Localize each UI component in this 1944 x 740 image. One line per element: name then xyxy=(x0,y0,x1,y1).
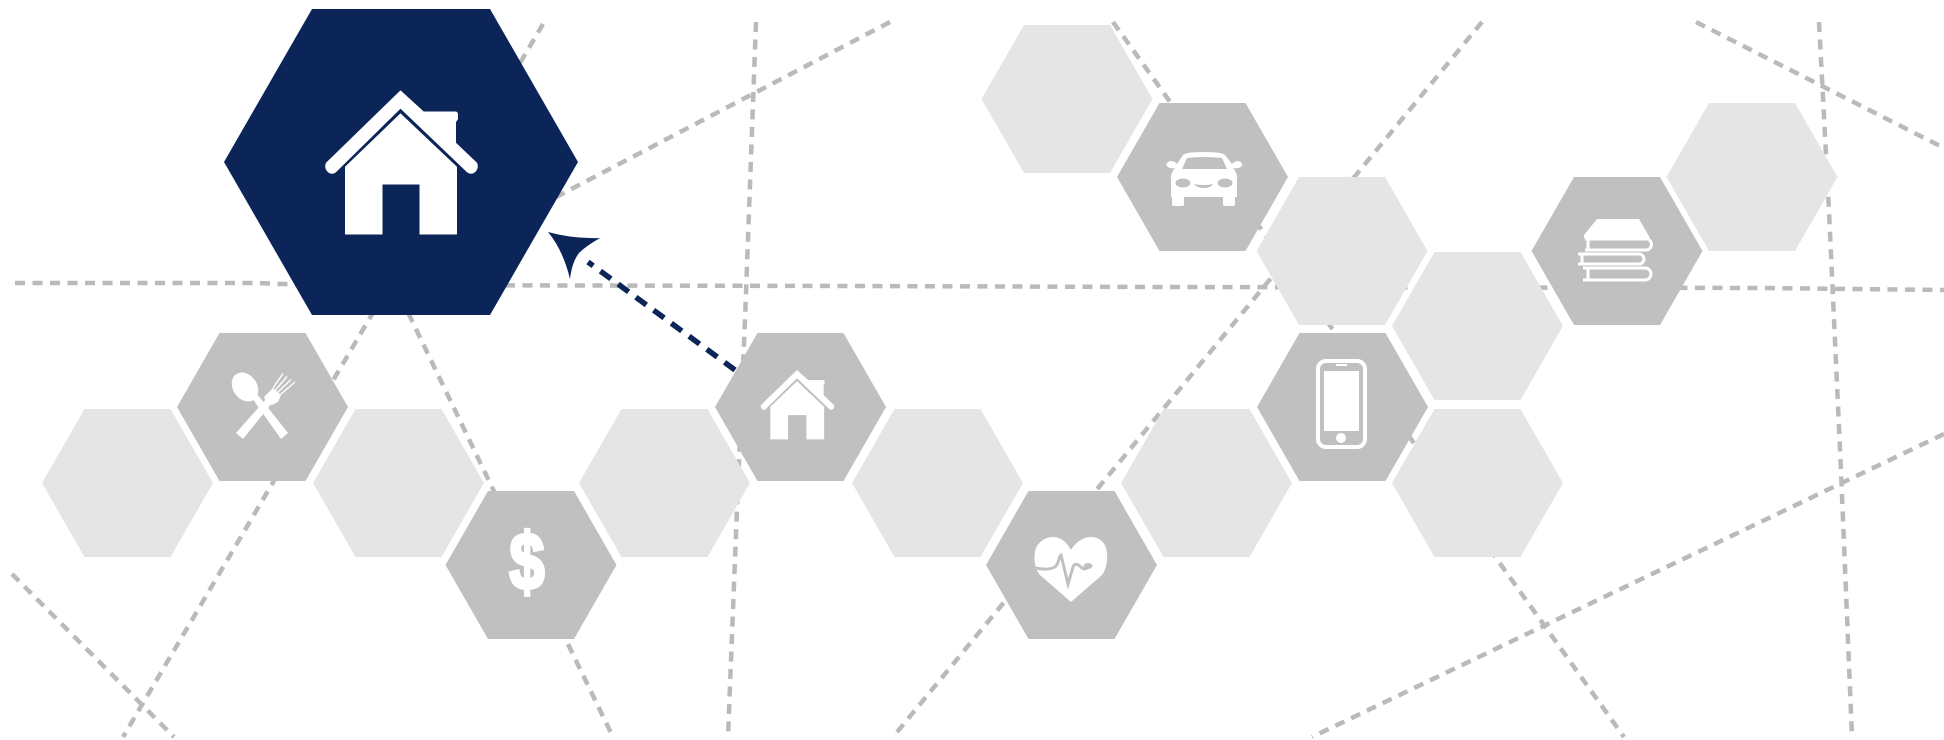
icon: heart with pulse xyxy=(1035,537,1107,602)
icon: car xyxy=(1166,152,1242,206)
hexagon: housing xyxy=(715,333,886,481)
light hexagons xyxy=(42,25,1838,557)
icon: spoon and fork xyxy=(226,367,295,439)
hexagon: transport xyxy=(1117,103,1288,251)
icon: large house xyxy=(326,91,477,234)
hexagon: money xyxy=(446,491,616,639)
icon: small house xyxy=(761,370,834,439)
hexagon: health xyxy=(986,491,1157,639)
hexagon: education xyxy=(1532,177,1702,325)
dashed arrow line to home xyxy=(588,262,735,370)
arrowhead xyxy=(548,232,600,279)
big navy home hexagon xyxy=(224,9,578,315)
icon: stack of books xyxy=(1578,219,1652,280)
icon: smartphone xyxy=(1318,361,1365,447)
icon: dollar sign: $ xyxy=(510,518,544,607)
hexagon: food xyxy=(177,333,348,481)
hexagon: mobile xyxy=(1257,333,1428,481)
